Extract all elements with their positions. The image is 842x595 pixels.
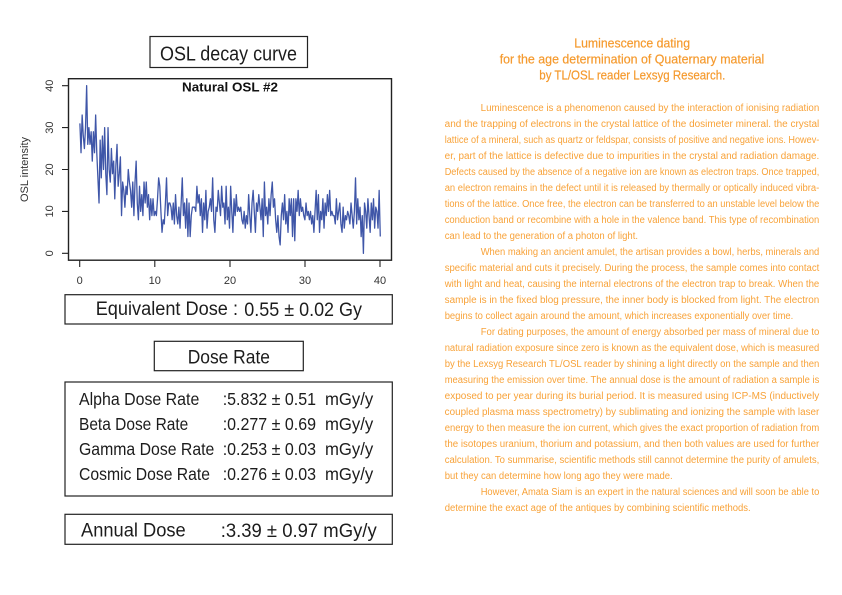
text block: paragraph 1: an electron remains in the defect until it is released by thermally or optically induced vibra- — [445, 183, 819, 194]
text block: paragraph 3: exposed to per year during its burial period. It is measured using ICP-MS (inductively — [445, 391, 819, 402]
result box: annual dose: :3.39 ± 0.97 mGy/y — [221, 521, 377, 542]
panel: dose rate table — [65, 382, 392, 496]
x axis: 10 — [149, 275, 161, 287]
text block: paragraph 2: When making an ancient amulet, the artisan provides a bowl, herbs, minerals and — [481, 247, 819, 258]
row: cosmic dose rate: Cosmic Dose Rate — [79, 464, 210, 484]
title: luminescence dating — [500, 35, 764, 82]
row: beta dose rate: Beta Dose Rate — [79, 414, 188, 434]
result box: equivalent dose: Equivalent Dose : — [96, 299, 238, 320]
row: alpha dose rate: :5.832 ± 0.51 — [223, 389, 316, 409]
text block: paragraph 2 — [444, 247, 820, 322]
text block: paragraph 3: coupled plasma mass spectrometry) by sublimating and ionizing the sample with laser — [445, 407, 820, 418]
text block: paragraph 4: determine the exact age of the antiques by combining scientific methods. — [445, 503, 751, 514]
text block: paragraph 3: energy to then measure the ion current, which gives the exact proportion of radiation from — [445, 423, 819, 434]
text block: paragraph 2: specific material and cuts it precisely. During the process, the sample comes into contact — [445, 263, 820, 274]
text block: paragraph 2: with light and heat, causing the internal electrons of the electron trap to break. When the — [444, 279, 819, 290]
y axis: 0 — [44, 250, 56, 256]
row: cosmic dose rate: mGy/y — [325, 464, 374, 484]
result box: annual dose: Annual Dose — [81, 521, 186, 542]
text block: paragraph 1: and the trapping of electrons in the crystal lattice of the dosimeter mineral. the crystal — [445, 119, 819, 130]
y axis: 10 — [44, 205, 56, 218]
text block: paragraph 2: begins to collect again around the amount, which increases exponentially over time. — [445, 311, 793, 322]
row: beta dose rate: mGy/y — [325, 414, 374, 434]
heading: dose rate — [154, 341, 303, 371]
row: alpha dose rate: mGy/y — [325, 389, 374, 409]
text block: paragraph 3 — [445, 327, 820, 482]
text block: paragraph 3: the isotopes uranium, thorium and potassium, and then both values are used for further — [445, 439, 820, 450]
text block: paragraph 1: Defects caused by the absence of a negative ion are known as electron traps. Once trapped, — [445, 167, 819, 178]
heading: OSL decay curve — [150, 36, 308, 68]
text block: paragraph 4 — [445, 487, 819, 514]
y axis — [19, 80, 68, 256]
row: gamma dose rate — [79, 439, 374, 459]
row: alpha dose rate: Alpha Dose Rate — [79, 389, 199, 409]
text block: paragraph 1: tions of the lattice. Once free, the electron can be transferred to an unstable level below the — [445, 199, 819, 210]
text block: paragraph 1: Luminescence is a phenomenon caused by the interaction of ionising radiation — [481, 103, 819, 114]
y axis: 40 — [44, 80, 56, 92]
title: luminescence dating: for the age determination of Quaternary material — [500, 51, 764, 66]
text block: paragraph 3: but they can determine how long ago they were made. — [445, 471, 673, 482]
title: luminescence dating: Luminescence dating — [574, 35, 690, 50]
text block: paragraph 1: er, part of the lattice is defective due to impurities in the crystal and radiation damage. — [445, 151, 819, 162]
row: beta dose rate: :0.277 ± 0.69 — [223, 414, 316, 434]
chart: Natural OSL #2 decay curve — [19, 79, 392, 287]
chart title: Natural OSL #2 — [182, 80, 278, 95]
x axis: 40 — [374, 275, 386, 287]
x axis: 0 — [77, 275, 83, 287]
row: gamma dose rate: mGy/y — [325, 439, 374, 459]
text block: paragraph 3: calculation. To summarise, scientific methods still cannot determine the purity of amulets, — [445, 455, 819, 466]
y axis: 30 — [44, 121, 56, 134]
result box: equivalent dose: 0.55 ± 0.02 Gy — [244, 300, 362, 321]
text block: paragraph 1: conduction band or recombine with a hole in the valence band. This type of recombination — [445, 215, 819, 226]
text block: paragraph 4: However, Amata Siam is an expert in the natural sciences and will soon be able to — [481, 487, 819, 498]
row: gamma dose rate: Gamma Dose Rate — [79, 439, 214, 459]
row: cosmic dose rate: :0.276 ± 0.03 — [223, 464, 316, 484]
x axis — [77, 260, 386, 287]
text block: paragraph 1: can lead to the generation of a photon of light. — [445, 231, 638, 242]
text block: paragraph 3: by the Lexsyg Research TL/OSL reader by shining a light directly on the sample and then — [445, 359, 819, 370]
result box: equivalent dose — [65, 295, 392, 324]
x axis: 30 — [299, 275, 311, 287]
text block: paragraph 3: measuring the emission over time. The annual dose is the amount of radiation a sample is — [445, 375, 819, 386]
text block: paragraph 3: For dating purposes, the amount of energy absorbed per mass of mineral due to — [481, 327, 819, 338]
y axis: OSL intensity — [19, 137, 31, 202]
text block: paragraph 1: lattice of a mineral, such as quartz or feldspar, consists of positive and negative ions. Howev- — [445, 135, 819, 146]
text block: paragraph 1 — [445, 103, 819, 242]
x axis: 20 — [224, 275, 236, 287]
data line — [80, 86, 380, 253]
row: beta dose rate — [79, 414, 374, 434]
result box: annual dose — [65, 514, 392, 544]
row: cosmic dose rate — [79, 464, 374, 484]
heading: OSL decay curve: OSL decay curve — [160, 44, 297, 66]
row: gamma dose rate: :0.253 ± 0.03 — [223, 439, 316, 459]
y axis: 20 — [44, 163, 56, 176]
row: alpha dose rate — [79, 389, 374, 409]
heading: dose rate: Dose Rate — [188, 347, 270, 368]
title: luminescence dating: by TL/OSL reader Lexsyg Research. — [539, 67, 725, 82]
text block: paragraph 2: sample is in the fixed blog pressure, the inner body is blocked from light. The electron — [445, 295, 819, 306]
text block: paragraph 3: natural radiation exposure since zero is known as the equivalent dose, which is measured — [445, 343, 819, 354]
